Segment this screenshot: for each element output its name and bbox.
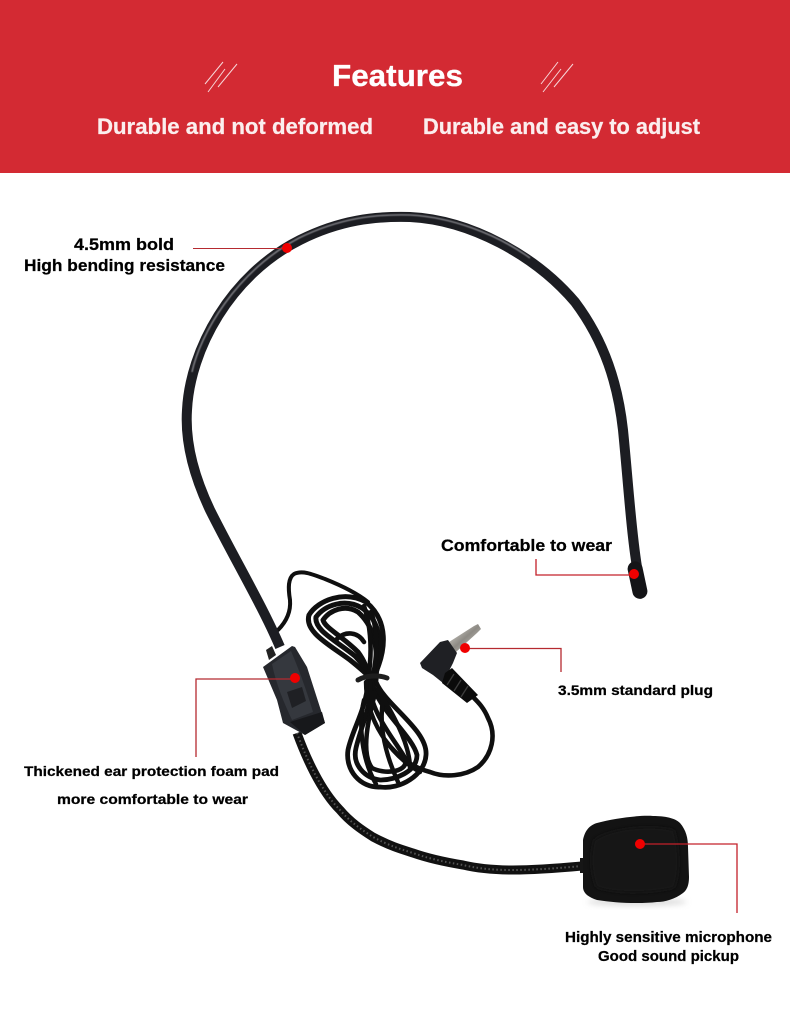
callout: microphone: Highly sensitive microphone [565, 930, 772, 946]
callout: foam pad: Thickened ear protection foam pad [24, 763, 279, 779]
callout: comfortable to wear [441, 536, 639, 579]
callout: plug: 3.5mm standard plug [558, 682, 713, 698]
callout: headband [24, 236, 292, 275]
callout: comfortable to wear: Comfortable to wear [441, 536, 612, 555]
headband tip [626, 560, 649, 600]
strain relief [442, 668, 478, 703]
callout: microphone [565, 839, 772, 965]
foam microphone [580, 816, 689, 906]
subheading: durable and not deformed: Durable and not deformed [97, 114, 373, 139]
callout: plug [460, 643, 713, 698]
headband highlight [192, 215, 530, 372]
headband wire [187, 217, 637, 647]
leader line [193, 248, 287, 250]
header banner [0, 0, 790, 173]
metal pin [449, 624, 481, 652]
heading: Features: Features [332, 58, 463, 93]
foam ear pad control [263, 646, 325, 735]
callout: foam pad: more comfortable to wear [57, 791, 249, 807]
label: 4.5mm bold [74, 236, 174, 254]
callout: headband: High bending resistance [24, 257, 225, 275]
braided cable [278, 572, 493, 787]
callout: foam pad [24, 673, 300, 807]
callout: microphone: Good sound pickup [598, 949, 739, 965]
subheading: durable and easy to adjust: Durable and easy to adjust [423, 114, 701, 139]
plug body [420, 640, 457, 683]
gooseneck [297, 733, 582, 870]
3.5mm plug [420, 624, 481, 703]
decorative slashes right [541, 62, 573, 92]
dot [282, 243, 292, 253]
decorative slashes left [205, 62, 237, 92]
headset product illustration [187, 215, 689, 906]
